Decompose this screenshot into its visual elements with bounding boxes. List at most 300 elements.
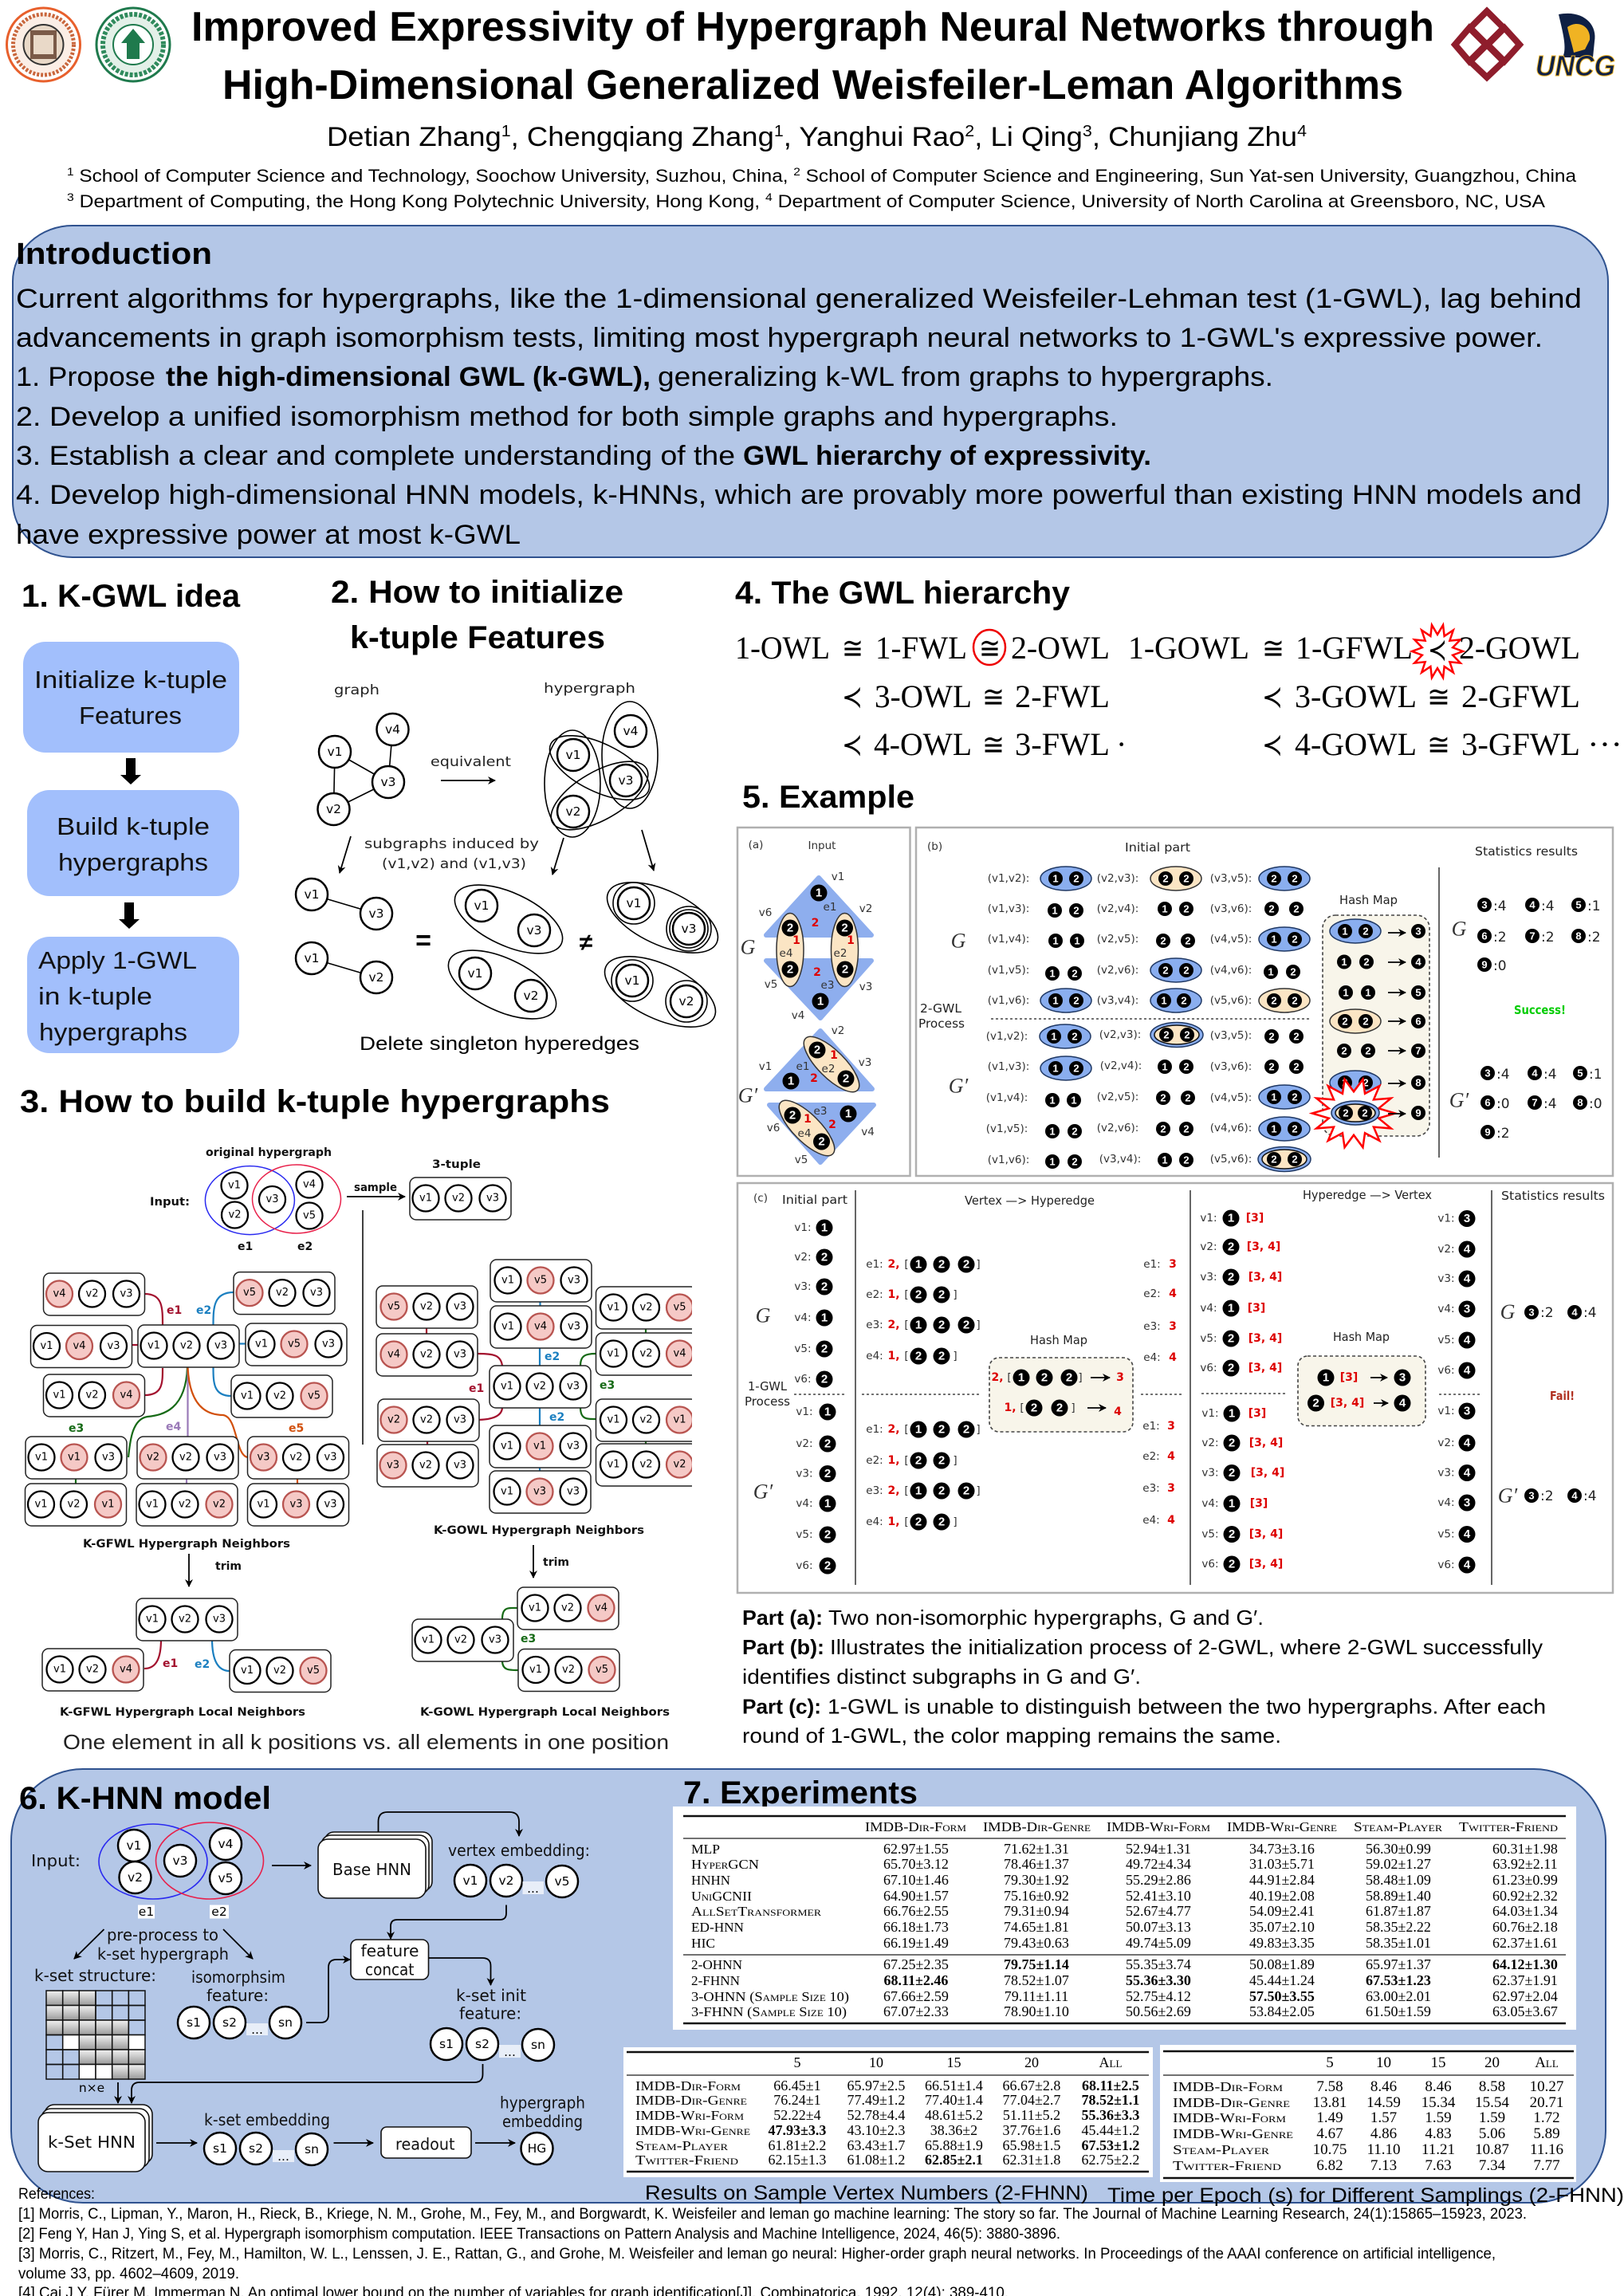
K-GOWL neighbors diagram: v2 <box>533 1381 546 1392</box>
hash map 1: 3 <box>1116 1371 1124 1384</box>
hyperedge to vertex rows: [3, 4] <box>1248 1332 1282 1345</box>
hash map 1: 4 <box>1114 1406 1122 1418</box>
initial part colours: v5: <box>794 1343 812 1355</box>
hypergraph diagram: v1 <box>565 748 581 762</box>
hash map: 1 <box>1342 925 1348 938</box>
k-set embedding <box>204 2110 330 2165</box>
arrow: equivalent: equivalent <box>431 754 511 770</box>
table: time per epoch: 11.10 <box>1366 2141 1401 2158</box>
title: High-Dimensional Generalized Weisfeiler-Leman Algorithms <box>222 62 1403 108</box>
hyperedge to vertex rows: [3, 4] <box>1248 1362 1282 1374</box>
input hypergraph: Input: <box>31 1851 81 1870</box>
hypergraph diagram: hypergraph <box>544 681 635 697</box>
sub-panel a: input hypergraphs: 2 <box>814 1043 820 1057</box>
references: [1] Morris, C., Lipman, Y., Maron, H., Rieck, B., Kriege, N. M., Grohe, M., Fey, M., and Borgwardt, K. Weisfeiler and leman go machine learning: The story so far. The Journal of Machine Learning Research, 24(1):15865–15923, 2023. <box>18 2206 1527 2223</box>
vertex to hyperedge rows: 2, <box>887 1484 900 1497</box>
K-GOWL neighbors diagram: v2 <box>640 1414 652 1425</box>
initial part rows: 2 <box>1072 968 1078 979</box>
formula: OWL hierarchy: ≺ <box>842 679 863 714</box>
initial part rows: 1 <box>1162 1060 1168 1073</box>
K-GFWL neighbors diagram <box>26 1272 349 1551</box>
K-GFWL local neighbors: e2 <box>195 1658 210 1671</box>
initial part rows: 2 <box>1185 934 1191 947</box>
K-GOWL neighbors diagram: v2 <box>387 1414 400 1425</box>
initial part rows: (v2,v3): <box>1097 872 1138 885</box>
initial part rows: 2 <box>1181 995 1187 1006</box>
caption: time per epoch: Time per Epoch (s) for Different Samplings (2-FHNN) <box>1107 2184 1624 2207</box>
statistics results c: G <box>1500 1300 1516 1323</box>
sub-panel b: 2-GWL process: G <box>951 930 966 952</box>
statistics results b: 3 <box>1484 1067 1491 1079</box>
statistics results b <box>1449 898 1602 1142</box>
initial part rows: 2 <box>1072 1126 1078 1137</box>
sub-panel a: input hypergraphs: G′ <box>738 1084 758 1107</box>
initial part rows: (v3,v5): <box>1210 1029 1252 1042</box>
hyperedge colours: 4 <box>1167 1450 1175 1463</box>
initial part rows: 2 <box>1268 1030 1275 1043</box>
K-GFWL neighbors diagram: v1 <box>35 1499 47 1510</box>
box: build <box>27 790 239 896</box>
sub-panel a: input hypergraphs: 1 <box>792 934 800 947</box>
K-GFWL neighbors diagram: v1 <box>53 1389 65 1402</box>
heading 3: 3. How to build k-tuple hypergraphs <box>20 1084 610 1119</box>
table: time per epoch: 15.34 <box>1421 2094 1456 2111</box>
sub-panel c: 1-GWL process: G′ <box>753 1480 773 1504</box>
hash map: 2 <box>1342 1076 1348 1089</box>
box: readout <box>381 2127 471 2158</box>
table: main results: 60.31±1.98 <box>1492 1841 1558 1857</box>
sub-panel c: 1-GWL process: 1-GWL <box>748 1379 788 1394</box>
initial part rows: 2 <box>1160 1092 1166 1103</box>
table: sample vertex numbers: 55.36±3.3 <box>1082 2107 1139 2123</box>
vertex embedding: v1 <box>462 1873 478 1888</box>
table: time per epoch: 5 <box>1326 2054 1334 2071</box>
initial part rows: 2 <box>1072 1156 1078 1167</box>
vertex to hyperedge rows: 2 <box>938 1484 945 1497</box>
arrow: equivalent <box>431 754 511 780</box>
table: sample vertex numbers: 77.40±1.4 <box>925 2092 983 2108</box>
K-GOWL local neighbors: v3 <box>489 1634 501 1645</box>
formula: OWL hierarchy: ≅ <box>982 727 1005 762</box>
hypergraph embedding <box>500 2094 585 2164</box>
sub-panel a: input hypergraphs: e1 <box>796 1060 809 1073</box>
formula: OWL hierarchy: 4-OWL <box>874 726 972 762</box>
sub-hypergraphs with singletons: v3 <box>681 922 697 936</box>
hash map: 1 <box>1343 987 1349 998</box>
table: time per epoch: 10.27 <box>1530 2078 1563 2095</box>
K-GFWL neighbors diagram: v2 <box>276 1287 289 1299</box>
sub-panel a: input hypergraphs: v2 <box>832 1024 844 1037</box>
vertex to hyperedge rows: 2 <box>938 1258 945 1271</box>
table: main results: 78.52±1.07 <box>1004 1972 1069 1988</box>
initial part rows: 2 <box>1073 872 1079 885</box>
K-GFWL local neighbors: v2 <box>86 1663 99 1676</box>
sub-panel a: input hypergraphs: Input <box>808 839 836 852</box>
affiliations: School of Computer Science and Engineering, Sun Yat-sen University, Guangzhou, China <box>800 166 1577 186</box>
K-GOWL neighbors diagram: v1 <box>501 1440 513 1453</box>
sub-panel a: input hypergraphs: e2 <box>834 947 847 960</box>
table: time per epoch: 13.81 <box>1313 2094 1347 2111</box>
initial part rows: (v5,v6): <box>1210 994 1252 1007</box>
sub-panel a: input hypergraphs: 2 <box>841 922 848 934</box>
initial part colours: v2: <box>796 1437 813 1450</box>
initial part rows: 2 <box>1072 1030 1078 1043</box>
hyperedge to vertex rows: 2 <box>1228 1240 1234 1253</box>
statistics results b: 6 <box>1481 930 1488 942</box>
K-GOWL neighbors diagram: v3 <box>454 1459 466 1472</box>
sub-panel a: input hypergraphs: v6 <box>767 1122 780 1134</box>
references: [3] Morris, C., Ritzert, M., Fey, M., Hamilton, W. L., Lenssen, J. E., Rattan, G., and Grohe, M. Weisfeiler and leman go neural: Higher-order graph neural networks. In Proceedings of the AAAI conference on artificial intelligence, <box>18 2246 1496 2263</box>
table: time per epoch: 1.57 <box>1370 2109 1397 2126</box>
k-set embedding: k-set embedding <box>204 2110 330 2129</box>
vertex colours: v6: <box>1437 1559 1455 1571</box>
initial part rows: (v3,v5): <box>1210 872 1252 885</box>
K-GFWL neighbors diagram: v3 <box>214 1339 227 1352</box>
references <box>18 2186 1527 2296</box>
isomorphism feature <box>178 1968 301 2038</box>
sub-hypergraphs with singletons: v1 <box>626 896 642 910</box>
vertex to hyperedge rows: 2 <box>938 1288 945 1301</box>
sub-panel b: 2-GWL process: Statistics results <box>1475 844 1578 859</box>
table: sample vertex numbers: 48.61±5.2 <box>925 2107 983 2123</box>
table: main results: 63.92±2.11 <box>1492 1856 1558 1872</box>
initial part rows: 1 <box>1271 933 1277 946</box>
box: apply <box>27 937 239 1053</box>
table: sample vertex numbers: IMDB-Wri-Genre <box>635 2123 750 2138</box>
initial part rows: 1 <box>1162 1154 1168 1166</box>
sub-panel b: 2-GWL process: (b) <box>927 840 942 853</box>
initial part colours: v3: <box>796 1467 813 1480</box>
formula: GOWL hierarchy: ≺ <box>1262 727 1283 762</box>
vertex embedding: v2 <box>498 1873 514 1888</box>
K-GFWL neighbors diagram: v1 <box>146 1499 159 1510</box>
hash map: 1 <box>1341 956 1347 968</box>
text block: introduction body: Current algorithms for hypergraphs, like the 1-dimensional generalized Weisfeiler-Lehman test (1-GWL), lag behind <box>16 284 1582 314</box>
hyperedge colours: e4: <box>1143 1351 1161 1364</box>
sub-panel a: input hypergraphs: v4 <box>861 1126 875 1138</box>
statistics results b: :1 <box>1589 1067 1602 1083</box>
initial part rows: 2 <box>1073 1062 1079 1075</box>
table: time per epoch: 4.83 <box>1425 2125 1452 2142</box>
vertex to hyperedge rows: ] <box>953 1350 957 1362</box>
sub-panel c: 1-GWL process: Process <box>745 1394 790 1409</box>
table: main results: 61.87±1.87 <box>1366 1903 1431 1919</box>
table: main results: 64.12±1.30 <box>1492 1956 1558 1972</box>
box: k-set HNN <box>38 2105 152 2172</box>
K-GFWL neighbors diagram: v3 <box>214 1451 226 1464</box>
table: time per epoch: 15 <box>1430 2054 1446 2071</box>
hash map 2: [3] <box>1340 1371 1358 1384</box>
K-GOWL neighbors diagram: v3 <box>387 1459 399 1472</box>
K-GOWL neighbors diagram: v3 <box>454 1301 466 1312</box>
vertex to hyperedge rows: 1, <box>887 1516 900 1528</box>
K-GFWL neighbors diagram: v1 <box>255 1338 268 1350</box>
text block: introduction body: 1. Propose <box>16 362 155 392</box>
initial part colours: 2 <box>824 1437 831 1451</box>
sub-panel c: 1-GWL process: (c) <box>753 1192 768 1205</box>
table: sample vertex numbers: 68.11±2.5 <box>1082 2078 1139 2094</box>
formula: OWL hierarchy: 1-OWL <box>735 630 830 666</box>
sub-panel a: input hypergraphs: e2 <box>822 1063 835 1075</box>
K-GOWL neighbors diagram: v1 <box>608 1301 619 1314</box>
graph diagram <box>317 682 408 825</box>
table: main results: IMDB-Dir-Genre <box>983 1819 1091 1834</box>
formula: OWL hierarchy: 3-OWL <box>875 678 972 714</box>
table: main results: 49.83±3.35 <box>1249 1935 1315 1951</box>
vertex to hyperedge rows: 2 <box>938 1515 945 1529</box>
k-set embedding: s2 <box>249 2141 263 2156</box>
sub-hypergraphs without singletons: v2 <box>523 989 539 1003</box>
K-GFWL neighbors diagram: v5 <box>243 1287 256 1299</box>
K-GFWL neighbors diagram: e5 <box>289 1422 304 1435</box>
arrow: concat to k-set init <box>429 1958 491 1985</box>
initial part colours: v4: <box>794 1311 812 1324</box>
vertex colours: 4 <box>1464 1527 1471 1541</box>
table: sample vertex numbers: 5 <box>794 2054 800 2070</box>
table: sample vertex numbers: 37.76±1.6 <box>1003 2122 1060 2138</box>
input hypergraph: v5 <box>218 1871 234 1885</box>
table: main results: 66.18±1.73 <box>883 1919 949 1935</box>
sub-panel c: 1-GWL process: Hyperedge —> Vertex <box>1303 1188 1432 1202</box>
table: main results: AllSetTransformer <box>691 1904 821 1919</box>
isomorphism feature: s2 <box>222 2015 237 2030</box>
sub-panel a: input hypergraphs: e4 <box>798 1127 811 1140</box>
box: apply: hypergraphs <box>39 1018 187 1046</box>
vertex to hyperedge rows <box>866 1256 981 1531</box>
formula: GOWL hierarchy: 3-GOWL <box>1295 678 1417 714</box>
table: sample vertex numbers: All <box>1099 2054 1122 2070</box>
k-set structure matrix: k-set structure: <box>34 1966 156 1985</box>
hyperedge to vertex rows: v5: <box>1201 1527 1219 1540</box>
hyperedge colours: 3 <box>1167 1482 1175 1495</box>
initial part rows: 2 <box>1292 1153 1298 1166</box>
sub-panel a: input hypergraphs: 1 <box>847 934 855 947</box>
table: sample vertex numbers: 63.43±1.7 <box>847 2137 905 2153</box>
hyperedge to vertex rows: v5: <box>1200 1332 1217 1345</box>
table: main results: 74.65±1.81 <box>1004 1919 1069 1935</box>
initial part rows: 2 <box>1271 995 1277 1006</box>
statistics results b: 6 <box>1484 1097 1491 1108</box>
hash map 1: 2, <box>991 1371 1004 1384</box>
K-GOWL neighbors diagram: e3 <box>600 1379 615 1392</box>
table: main results: 54.09±2.41 <box>1249 1903 1315 1919</box>
table: main results: 66.19±1.49 <box>883 1935 949 1951</box>
initial part rows: 2 <box>1163 1028 1170 1041</box>
hash map: 5 <box>1415 987 1421 998</box>
table: sample vertex numbers: 65.98±1.5 <box>1003 2137 1060 2153</box>
K-GOWL neighbors diagram: v3 <box>533 1486 546 1497</box>
table: main results: 67.53±1.23 <box>1366 1972 1431 1988</box>
isomorphism feature: isomorphsim <box>191 1968 285 1987</box>
statistics results b: :2 <box>1496 1126 1510 1142</box>
hyperedge to vertex rows: v3: <box>1201 1467 1219 1480</box>
k-set embedding: sn <box>305 2142 319 2156</box>
K-GFWL neighbors diagram: v2 <box>273 1390 286 1402</box>
initial part rows: (v1,v4): <box>988 933 1029 946</box>
isomorphism feature: s1 <box>187 2015 201 2030</box>
initial part rows: 1 <box>1052 1062 1059 1075</box>
sub-panel a: input hypergraphs: 1 <box>817 995 824 1008</box>
table: main results: HIC <box>691 1936 715 1951</box>
hyperedge to vertex rows: [3] <box>1246 1212 1264 1225</box>
initial part rows: 1 <box>1162 902 1168 915</box>
table: time per epoch: 8.58 <box>1479 2078 1505 2095</box>
K-GFWL neighbors diagram: v3 <box>324 1499 336 1510</box>
statistics results b: :2 <box>1493 930 1507 946</box>
initial part rows: (v4,v5): <box>1210 1091 1252 1104</box>
hash map: 2 <box>1363 925 1369 938</box>
K-GOWL neighbors diagram: v3 <box>568 1274 580 1287</box>
sub-panel b: 2-GWL process <box>916 828 1613 1176</box>
vertex to hyperedge rows: e2: <box>866 1288 883 1301</box>
references: [2] Feng Y, Han J, Ying S, et al. Hypergraph isomorphism computation. IEEE Transactions on Pattern Analysis and Machine Intelligence, 2024, 46(5): 3880-3896. <box>18 2226 1060 2243</box>
initial part rows: 1 <box>1271 1122 1277 1135</box>
logo: Soochow University <box>6 8 80 81</box>
K-GOWL neighbors diagram: v2 <box>420 1349 433 1360</box>
vertex colours: v5: <box>1437 1334 1455 1347</box>
K-GFWL neighbors diagram: v3 <box>322 1338 335 1350</box>
K-GFWL local neighbors: v2 <box>273 1665 286 1677</box>
K-GFWL local neighbors: v3 <box>213 1614 226 1625</box>
K-GFWL neighbors diagram: v4 <box>120 1389 132 1402</box>
box: base HNN: Base HNN <box>332 1860 411 1879</box>
table: sample vertex numbers: 77.04±2.7 <box>1003 2092 1060 2108</box>
box: base HNN <box>318 1832 432 1898</box>
vertex to hyperedge rows: ] <box>976 1258 981 1271</box>
table: main results: 66.76±2.55 <box>883 1903 949 1919</box>
initial part rows: (v1,v4): <box>986 1091 1028 1104</box>
box: feature concat <box>351 1940 429 1980</box>
initial part rows: 2 <box>1183 1154 1189 1166</box>
vertex to hyperedge rows: 2 <box>915 1288 922 1301</box>
sub-panel a: input hypergraphs: 2 <box>787 922 793 934</box>
table: time per epoch: 6.82 <box>1316 2157 1343 2174</box>
sub-panel a: input hypergraphs: 2 <box>789 1108 796 1122</box>
hash map: 1 <box>1365 987 1371 998</box>
statistics results b: :0 <box>1496 1096 1510 1112</box>
hyperedge to vertex rows: v4: <box>1201 1497 1219 1510</box>
hyperedge colours: 4 <box>1169 1351 1177 1364</box>
affiliations: Department of Computer Science, University of North Carolina at Greensboro, NC, USA <box>773 191 1545 211</box>
table: main results: IMDB-Wri-Form <box>1107 1819 1210 1834</box>
K-GFWL neighbors diagram: v1 <box>41 1340 53 1352</box>
table: main results: 60.76±2.18 <box>1492 1919 1558 1935</box>
hyperedge to vertex rows: 2 <box>1228 1271 1234 1284</box>
statistics results b: 8 <box>1577 1097 1583 1108</box>
statistics results c: G′ <box>1498 1484 1518 1507</box>
hyperedge colours: e1: <box>1143 1258 1161 1271</box>
table: main results: 40.19±2.08 <box>1249 1888 1315 1904</box>
vertex to hyperedge rows: e1: <box>866 1423 883 1436</box>
table: main results: 53.84±2.05 <box>1249 2003 1315 2019</box>
vertex to hyperedge rows: 1, <box>887 1350 900 1362</box>
affiliations: 2 <box>793 165 800 178</box>
3-tuple: v2 <box>452 1193 465 1204</box>
text block: part descriptions: Illustrates the initialization process of 2-GWL, where 2-GWL successfully <box>830 1635 1543 1659</box>
initial part rows: 2 <box>1292 995 1298 1006</box>
arrow: input to base HNN <box>272 1865 311 1866</box>
k-set structure matrix <box>34 1966 156 2095</box>
initial part colours: 2 <box>821 1343 828 1355</box>
input hypergraph: v3 <box>266 1193 278 1205</box>
sub-panel c: 1-GWL process: Vertex —> Hyperedge <box>965 1193 1095 1208</box>
references: References: <box>18 2186 95 2203</box>
heading 7: 7. Experiments <box>683 1775 918 1810</box>
hyperedge colours: e3: <box>1142 1482 1160 1495</box>
vertex to hyperedge rows: 2 <box>963 1319 969 1331</box>
caption: element positions: One element in all k positions vs. all elements in one position <box>63 1730 669 1754</box>
hash map 1: 1, <box>1004 1402 1016 1414</box>
k-set init feature: sn <box>531 2038 545 2052</box>
table: sample vertex numbers: 38.36±2 <box>930 2122 977 2138</box>
initial part colours: v4: <box>796 1497 813 1510</box>
table: main results: 62.97±2.04 <box>1492 1988 1558 2004</box>
table: time per epoch: 7.77 <box>1533 2157 1560 2174</box>
vertex colours: v4: <box>1437 1303 1455 1315</box>
statistics results c: 4 <box>1571 1306 1578 1319</box>
affiliations <box>67 165 1577 211</box>
formula: OWL hierarchy: 2-FWL <box>1015 678 1110 714</box>
initial part colours: 2 <box>821 1250 828 1264</box>
text block: part descriptions: Part (b): <box>742 1635 824 1659</box>
table: main results: 2-FHNN <box>691 1973 740 1988</box>
table: sample vertex numbers: 62.15±1.3 <box>769 2152 826 2168</box>
hyperedge to vertex rows: [3, 4] <box>1251 1467 1284 1480</box>
arrow: down 2 <box>119 902 140 929</box>
table: main results: 50.08±1.89 <box>1249 1956 1315 1972</box>
caption: delete singleton: Delete singleton hyperedges <box>360 1033 639 1055</box>
affiliations: School of Computer Science and Technology, Soochow University, Suzhou, China, <box>74 166 793 186</box>
K-GFWL neighbors diagram: v1 <box>68 1451 81 1464</box>
initial part rows: 1 <box>1051 1030 1057 1043</box>
table: main results: 58.48±1.09 <box>1366 1872 1431 1888</box>
K-GFWL local neighbors: e1 <box>163 1657 178 1670</box>
sub-panel a: input hypergraphs: 1 <box>804 1113 812 1126</box>
K-GFWL neighbors diagram: v2 <box>147 1451 159 1464</box>
initial part rows: 2 <box>1293 1060 1300 1073</box>
heading: introduction: Introduction <box>16 238 212 271</box>
vertex embedding: vertex embedding: <box>448 1841 590 1860</box>
hash map 1: Hash Map <box>1030 1333 1087 1347</box>
table: main results: MLP <box>691 1842 720 1857</box>
K-GFWL neighbors diagram: v2 <box>68 1499 80 1510</box>
table: main results: IMDB-Wri-Genre <box>1227 1819 1337 1834</box>
formula: OWL hierarchy: 3-FWL <box>1015 726 1110 762</box>
heading 6: 6. K-HNN model <box>19 1781 271 1816</box>
table: main results: 34.73±3.16 <box>1249 1841 1315 1857</box>
vertex colours: v4: <box>1437 1496 1455 1509</box>
sub-panel a: input hypergraphs: v5 <box>795 1154 808 1166</box>
hypergraph embedding: HG <box>528 2141 546 2156</box>
initial part rows: 2 <box>1292 872 1298 885</box>
vertex embedding: v5 <box>554 1874 570 1889</box>
table: main results: UniGCNII <box>691 1889 752 1904</box>
K-GOWL neighbors diagram: v4 <box>387 1349 400 1360</box>
label: pre-process: k-set hypergraph <box>97 1944 229 1964</box>
table: time per epoch: 7.63 <box>1425 2157 1452 2174</box>
caption: sample vertex numbers: Results on Sample Vertex Numbers (2-FHNN) <box>645 2182 1088 2204</box>
box: readout: readout <box>395 2135 455 2154</box>
initial part rows: (v4,v5): <box>1210 933 1252 946</box>
subgraph edges: v1 <box>304 887 320 902</box>
sub-panel b: 2-GWL process: Process <box>918 1016 965 1031</box>
initial part colours: v6: <box>796 1559 813 1572</box>
hypergraph diagram: v4 <box>623 724 639 738</box>
hash map: 2 <box>1365 1044 1371 1057</box>
box: k-set HNN: k-Set HNN <box>48 2133 136 2152</box>
sub-panel a: input hypergraphs: v6 <box>759 906 772 919</box>
vertex colours: v2: <box>1437 1243 1455 1256</box>
